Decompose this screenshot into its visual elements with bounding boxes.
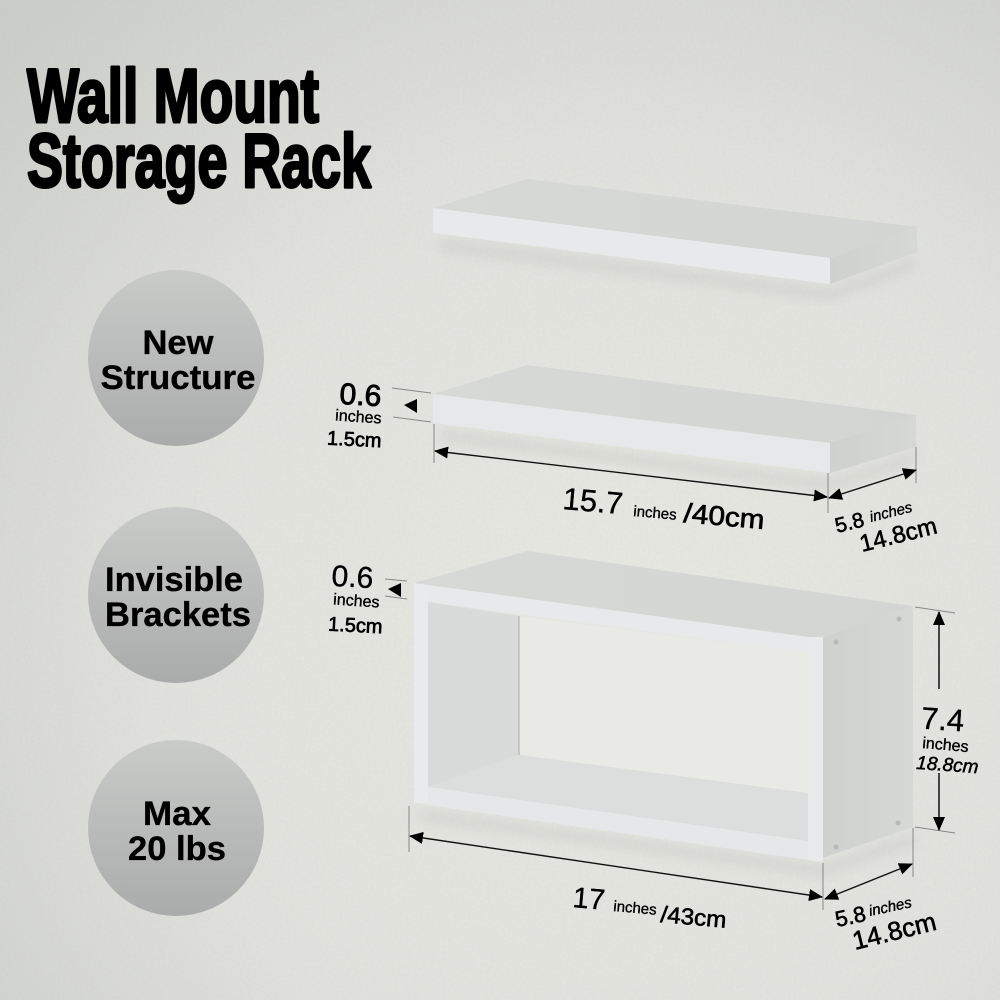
dimension: cube length: inches	[613, 898, 657, 919]
dimension: shelf length	[434, 424, 828, 535]
shelf 2	[433, 365, 916, 490]
badge: invisible brackets: Invisible	[105, 561, 243, 599]
badge: new structure	[88, 270, 264, 446]
dimension: shelf thickness: 0.6	[339, 378, 382, 413]
dimension: shelf depth: inches	[868, 499, 915, 526]
dimension: shelf length: 15.7	[561, 481, 625, 521]
title	[27, 54, 372, 204]
dimension: cube depth: 5.8	[833, 901, 868, 932]
title: Storage Rack	[27, 119, 372, 204]
dimension: cube depth	[825, 828, 939, 956]
badge: max 20 lbs	[88, 740, 264, 916]
dimension: cube height	[915, 607, 979, 833]
dimension: cube height: inches	[922, 735, 969, 756]
dimension: cube thickness	[328, 560, 407, 638]
dimension: shelf thickness: 1.5cm	[327, 428, 382, 452]
dimension: shelf length: inches	[633, 503, 677, 524]
dimension: cube length: 17	[571, 882, 606, 917]
dimension: shelf depth: 5.8	[833, 508, 867, 538]
dimension: shelf thickness: inches	[335, 407, 382, 428]
dimension: shelf thickness	[327, 378, 431, 452]
dimension: cube height: 18.8cm	[916, 753, 979, 778]
badge: invisible brackets: Brackets	[105, 596, 251, 634]
badge: max 20 lbs: Max	[143, 795, 211, 833]
dimension: cube height: 7.4	[920, 701, 965, 738]
dimension: cube thickness: inches	[333, 591, 380, 612]
dimension: cube depth: 14.8cm	[849, 906, 939, 956]
dimension: cube thickness: 0.6	[331, 560, 374, 595]
badge: max 20 lbs: 20 lbs	[128, 830, 226, 868]
dimension: shelf depth: 14.8cm	[857, 513, 940, 558]
dimension: cube length: /43cm	[660, 901, 728, 933]
badge: invisible brackets	[88, 507, 264, 683]
dimension: shelf length: /40cm	[682, 498, 766, 535]
shelf 1	[433, 179, 917, 300]
badge: new structure: Structure	[100, 359, 256, 397]
dimension: shelf depth	[829, 447, 940, 558]
dimension: cube depth: inches	[867, 894, 914, 920]
dimension: cube length	[409, 806, 823, 933]
dimension: cube thickness: 1.5cm	[328, 614, 383, 638]
badge: new structure: New	[142, 324, 214, 362]
title: Wall Mount	[27, 54, 319, 139]
cube shelf	[414, 551, 913, 876]
